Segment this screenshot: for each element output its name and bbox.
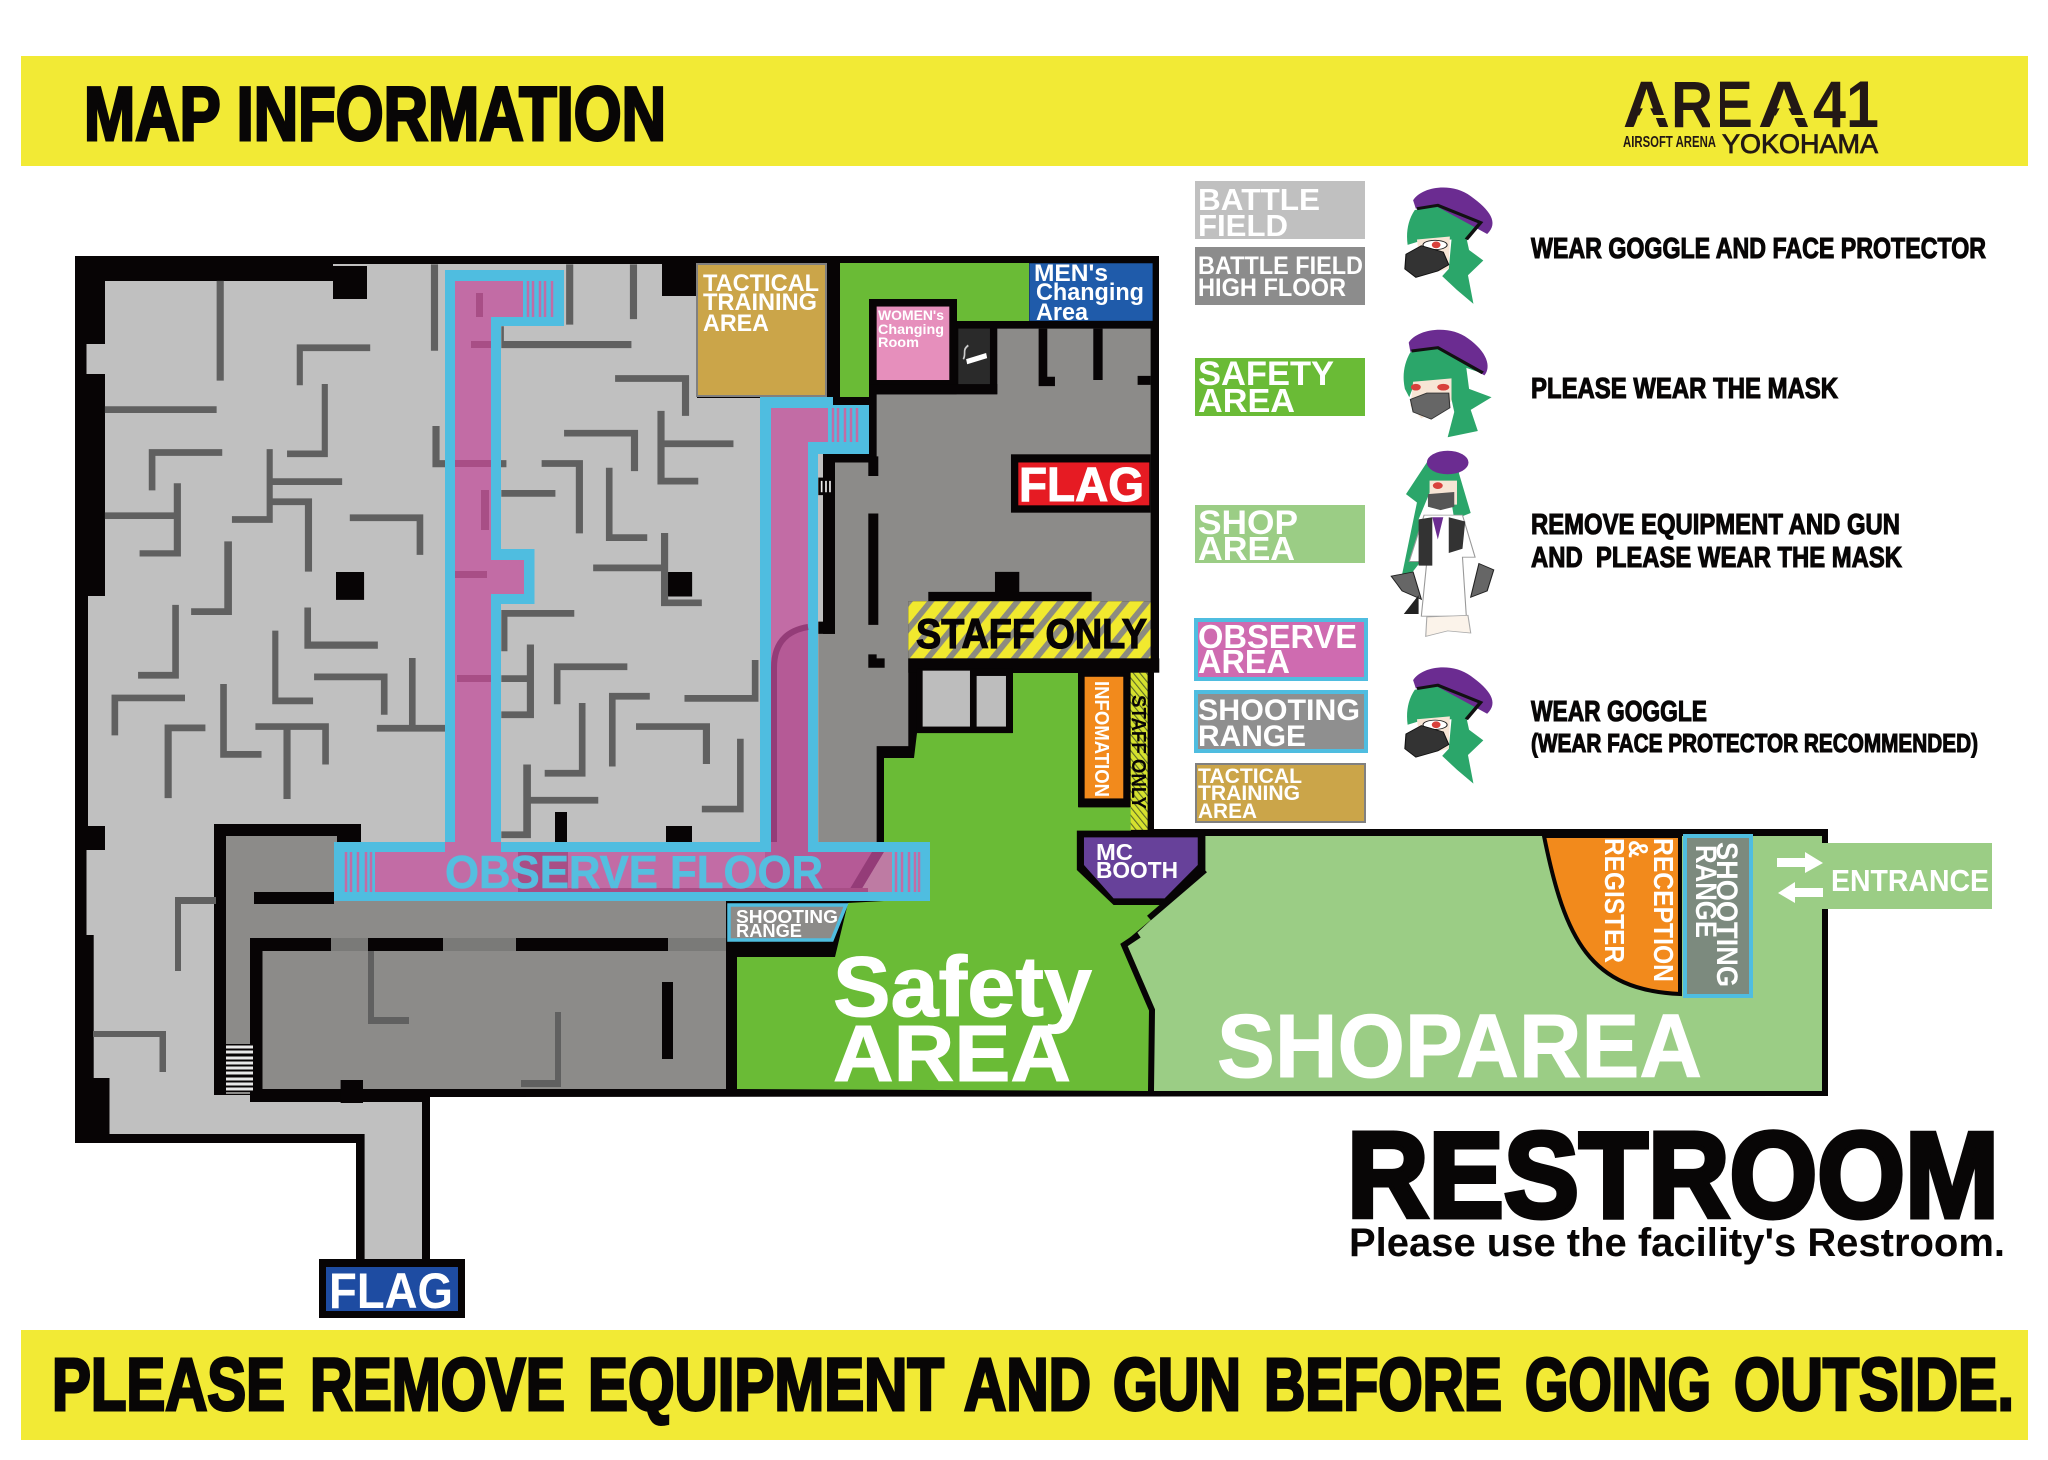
rule: goggle (1531, 696, 1978, 758)
legend: observe: AREA (1198, 643, 1290, 680)
rule: mask: PLEASE WEAR THE MASK (1531, 373, 1838, 405)
legend: shooting: SHOOTING (1198, 694, 1360, 727)
observe bar (334, 842, 930, 901)
tactical label: TRAINING (703, 289, 817, 316)
battle field floor (86, 264, 823, 1259)
interior walls (105, 264, 758, 838)
legend: safety (1195, 355, 1365, 419)
logo (1623, 67, 1879, 159)
legend: high floor: BATTLE FIELD (1198, 252, 1363, 280)
logo: E (1712, 67, 1753, 141)
legend: high floor (1195, 247, 1365, 305)
shop area floor (1124, 836, 1992, 1091)
footer warning: AND (964, 1343, 1091, 1426)
shooting range entrance side: RANGE (1689, 845, 1722, 938)
staff only strip (1131, 673, 1148, 830)
rule: remove equipment: REMOVE EQUIPMENT AND GUN (1531, 509, 1900, 541)
legend: observe: OBSERVE (1198, 618, 1357, 655)
footer warning: REMOVE (310, 1343, 565, 1426)
men's label (1034, 260, 1144, 326)
icon: stairs (226, 1044, 253, 1092)
logo: R (1671, 67, 1713, 141)
map labels (703, 260, 1702, 1098)
flag red box (1011, 454, 1151, 513)
safety area floor (737, 673, 1210, 1091)
footer banner (21, 1330, 2028, 1440)
footer warning: PLEASE (52, 1343, 285, 1426)
women's label: Changing (878, 321, 944, 337)
logo: A (1623, 67, 1670, 141)
footer warning: GUN (1113, 1343, 1241, 1426)
rule: remove equipment: AND PLEASE WEAR THE MASK (1531, 542, 1902, 574)
legend: tactical: TACTICAL (1198, 765, 1302, 788)
shooting range small: RANGE (736, 921, 802, 941)
icon: small stairs (818, 478, 834, 495)
shooting range entrance side: SHOOTING (1710, 842, 1743, 987)
reception and register: & (1623, 840, 1654, 858)
legend: shop (1195, 504, 1365, 567)
staff only hatch (908, 601, 1151, 658)
shooting range entrance side (1685, 836, 1751, 996)
footer warning: GOING (1525, 1343, 1711, 1426)
footer warning (52, 1343, 2014, 1426)
walkway right (760, 397, 869, 860)
tactical label: TACTICAL (703, 270, 819, 297)
pillars and outer thickening (333, 256, 697, 842)
rule: remove equipment (1531, 509, 1902, 574)
women's label (878, 307, 944, 350)
mc booth label: BOOTH (1096, 857, 1178, 883)
lower high floor room (93, 824, 726, 1103)
women's label: Room (878, 334, 919, 350)
flag label: FLAG (1019, 459, 1144, 512)
legend: shooting: RANGE (1198, 720, 1306, 753)
mc booth (1077, 831, 1205, 905)
reception and register: RECEPTION (1648, 838, 1679, 982)
mc booth label: MC (1096, 839, 1133, 865)
staff only label: STAFF ONLY (916, 610, 1147, 657)
legend: battle field: FIELD (1198, 208, 1288, 243)
icon: head with mask (1404, 330, 1492, 437)
restroom notice (1347, 1107, 2005, 1265)
icon: head with goggle (1405, 667, 1493, 784)
safety shop divider (1124, 870, 1205, 1091)
women's label: WOMEN's (878, 307, 944, 323)
upper right high floor (818, 263, 1159, 843)
building outline (75, 256, 1828, 1259)
entrance (1777, 852, 1989, 903)
information desk (1078, 673, 1130, 807)
men's label: Changing (1036, 279, 1144, 306)
legend (1195, 181, 1366, 823)
icon: head with goggle and face protector (1405, 187, 1493, 304)
legend: battle field: BATTLE (1198, 182, 1320, 217)
observe floor label: OBSERVE FLOOR (445, 846, 823, 898)
men's label: MEN's (1034, 260, 1108, 287)
arrow: in (1777, 852, 1823, 873)
staff only vertical label: STAFF ONLY (1127, 695, 1149, 810)
restroom note: Please use the facility's Restroom. (1349, 1221, 2005, 1265)
women's changing room (869, 299, 997, 394)
shooting range small (729, 905, 846, 941)
icon: full body character (1391, 451, 1494, 636)
rules text (1531, 233, 1986, 758)
legend: observe (1196, 618, 1366, 680)
legend: shop: SHOP (1198, 504, 1298, 542)
information label: INFOMATION (1090, 681, 1112, 797)
safety area label (833, 940, 1092, 1098)
men's changing area (1029, 263, 1153, 321)
observe floor (334, 270, 930, 901)
logo: AIRSOFT ARENA (1623, 134, 1716, 151)
reception and register: REGISTER (1599, 838, 1630, 963)
tactical label (703, 270, 819, 337)
upper safety area (840, 263, 1029, 397)
staff rooms (908, 658, 1159, 733)
shop area label: SHOPAREA (1217, 997, 1702, 1097)
walkway left (445, 270, 564, 860)
entrance label: ENTRANCE (1831, 863, 1989, 898)
safety area label: Safety (833, 940, 1092, 1035)
men's label: Area (1036, 299, 1089, 326)
header banner (21, 56, 2028, 166)
mc booth label (1096, 839, 1178, 883)
legend: high floor: HIGH FLOOR (1198, 274, 1346, 302)
rule: goggle: WEAR GOGGLE (1531, 696, 1707, 728)
footer warning: EQUIPMENT (588, 1343, 944, 1426)
logo: YOKOHAMA (1722, 129, 1878, 159)
logo: A (1758, 67, 1810, 141)
flag blue: FLAG (329, 1263, 453, 1319)
legend: safety: SAFETY (1198, 355, 1334, 393)
tactical training area (697, 264, 826, 396)
tactical label: AREA (703, 310, 769, 337)
legend: battle field (1195, 181, 1365, 243)
footer warning: BEFORE (1264, 1343, 1502, 1426)
arrow: out (1778, 882, 1823, 903)
reception and register (1544, 836, 1680, 994)
legend: tactical (1196, 764, 1365, 823)
legend: shooting (1196, 692, 1366, 753)
shooting range small: SHOOTING (736, 907, 838, 927)
legend: shop: AREA (1198, 530, 1295, 567)
floor map (75, 256, 1992, 1319)
logo: 41 (1813, 67, 1879, 141)
legend: safety: AREA (1198, 382, 1295, 419)
safety area label: AREA (833, 1009, 1071, 1098)
restroom heading: RESTROOM (1347, 1107, 1999, 1243)
icon: smoking area (958, 329, 990, 384)
title: MAP INFORMATION (84, 72, 666, 157)
legend: tactical: TRAINING (1198, 782, 1300, 805)
legend: tactical: AREA (1198, 800, 1257, 823)
